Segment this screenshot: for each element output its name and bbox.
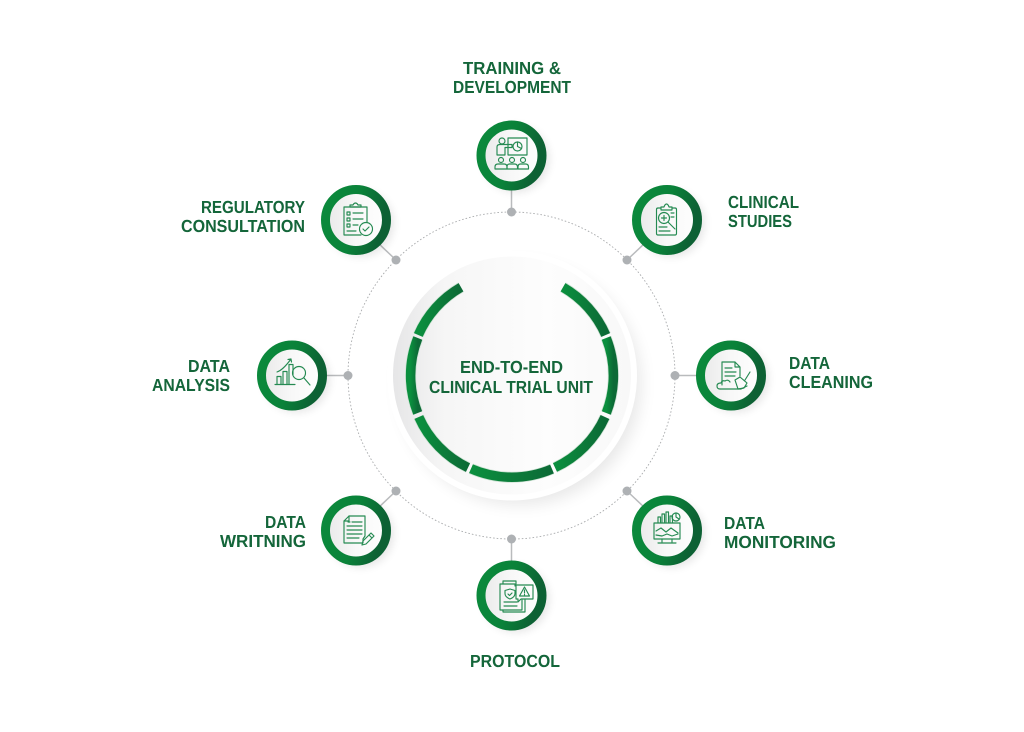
label: training and development: DEVELOPMENT [453,77,571,97]
icon: presenter and audience [495,138,528,169]
label: clinical studies [728,192,799,231]
label: data analysis [152,356,230,395]
icon: bar chart with magnifier [275,359,310,385]
label: data analysis: DATA [188,356,230,376]
central disc [387,250,641,505]
icon: clipboard with magnifier [656,204,676,235]
label: data cleaning: CLEANING [789,372,873,392]
node: data cleaning [670,345,873,412]
label: data writing: WRITNING [220,531,306,551]
label: data cleaning: DATA [789,353,830,373]
label: data monitoring: DATA [724,513,765,533]
icon: documents with shield and warning [500,581,533,612]
green segmented ring [411,287,613,477]
label: regulatory consultation: REGULATORY [201,197,305,217]
icon: clipboard with check [344,203,372,236]
icon: document, cloud and broom [717,362,750,389]
node: protocol [470,534,560,671]
node: data analysis [152,345,352,412]
center title [429,357,593,397]
label: data cleaning [789,353,873,392]
center title: END-TO-END [460,357,563,377]
label: data analysis: ANALYSIS [152,375,230,395]
label: training and development [453,58,571,97]
node: training and development [453,58,571,216]
label: training and development: TRAINING & [463,58,561,78]
node: regulatory consultation [181,190,400,264]
node: data monitoring [622,486,836,567]
label: data writing: DATA [265,512,306,532]
label: protocol: PROTOCOL [470,651,560,671]
icon: monitor with charts [654,512,680,543]
center title: CLINICAL TRIAL UNIT [429,377,593,397]
label: clinical studies: STUDIES [728,211,792,231]
label: regulatory consultation: CONSULTATION [181,216,305,236]
label: data monitoring: MONITORING [724,532,836,552]
icon: document with pen [344,516,374,545]
node: clinical studies [622,190,799,264]
dashed orbit circle [348,212,675,539]
label: regulatory consultation [181,197,305,236]
node: data writing [220,486,400,567]
label: data monitoring [724,513,836,552]
label: clinical studies: CLINICAL [728,192,799,212]
label: data writing [220,512,306,551]
